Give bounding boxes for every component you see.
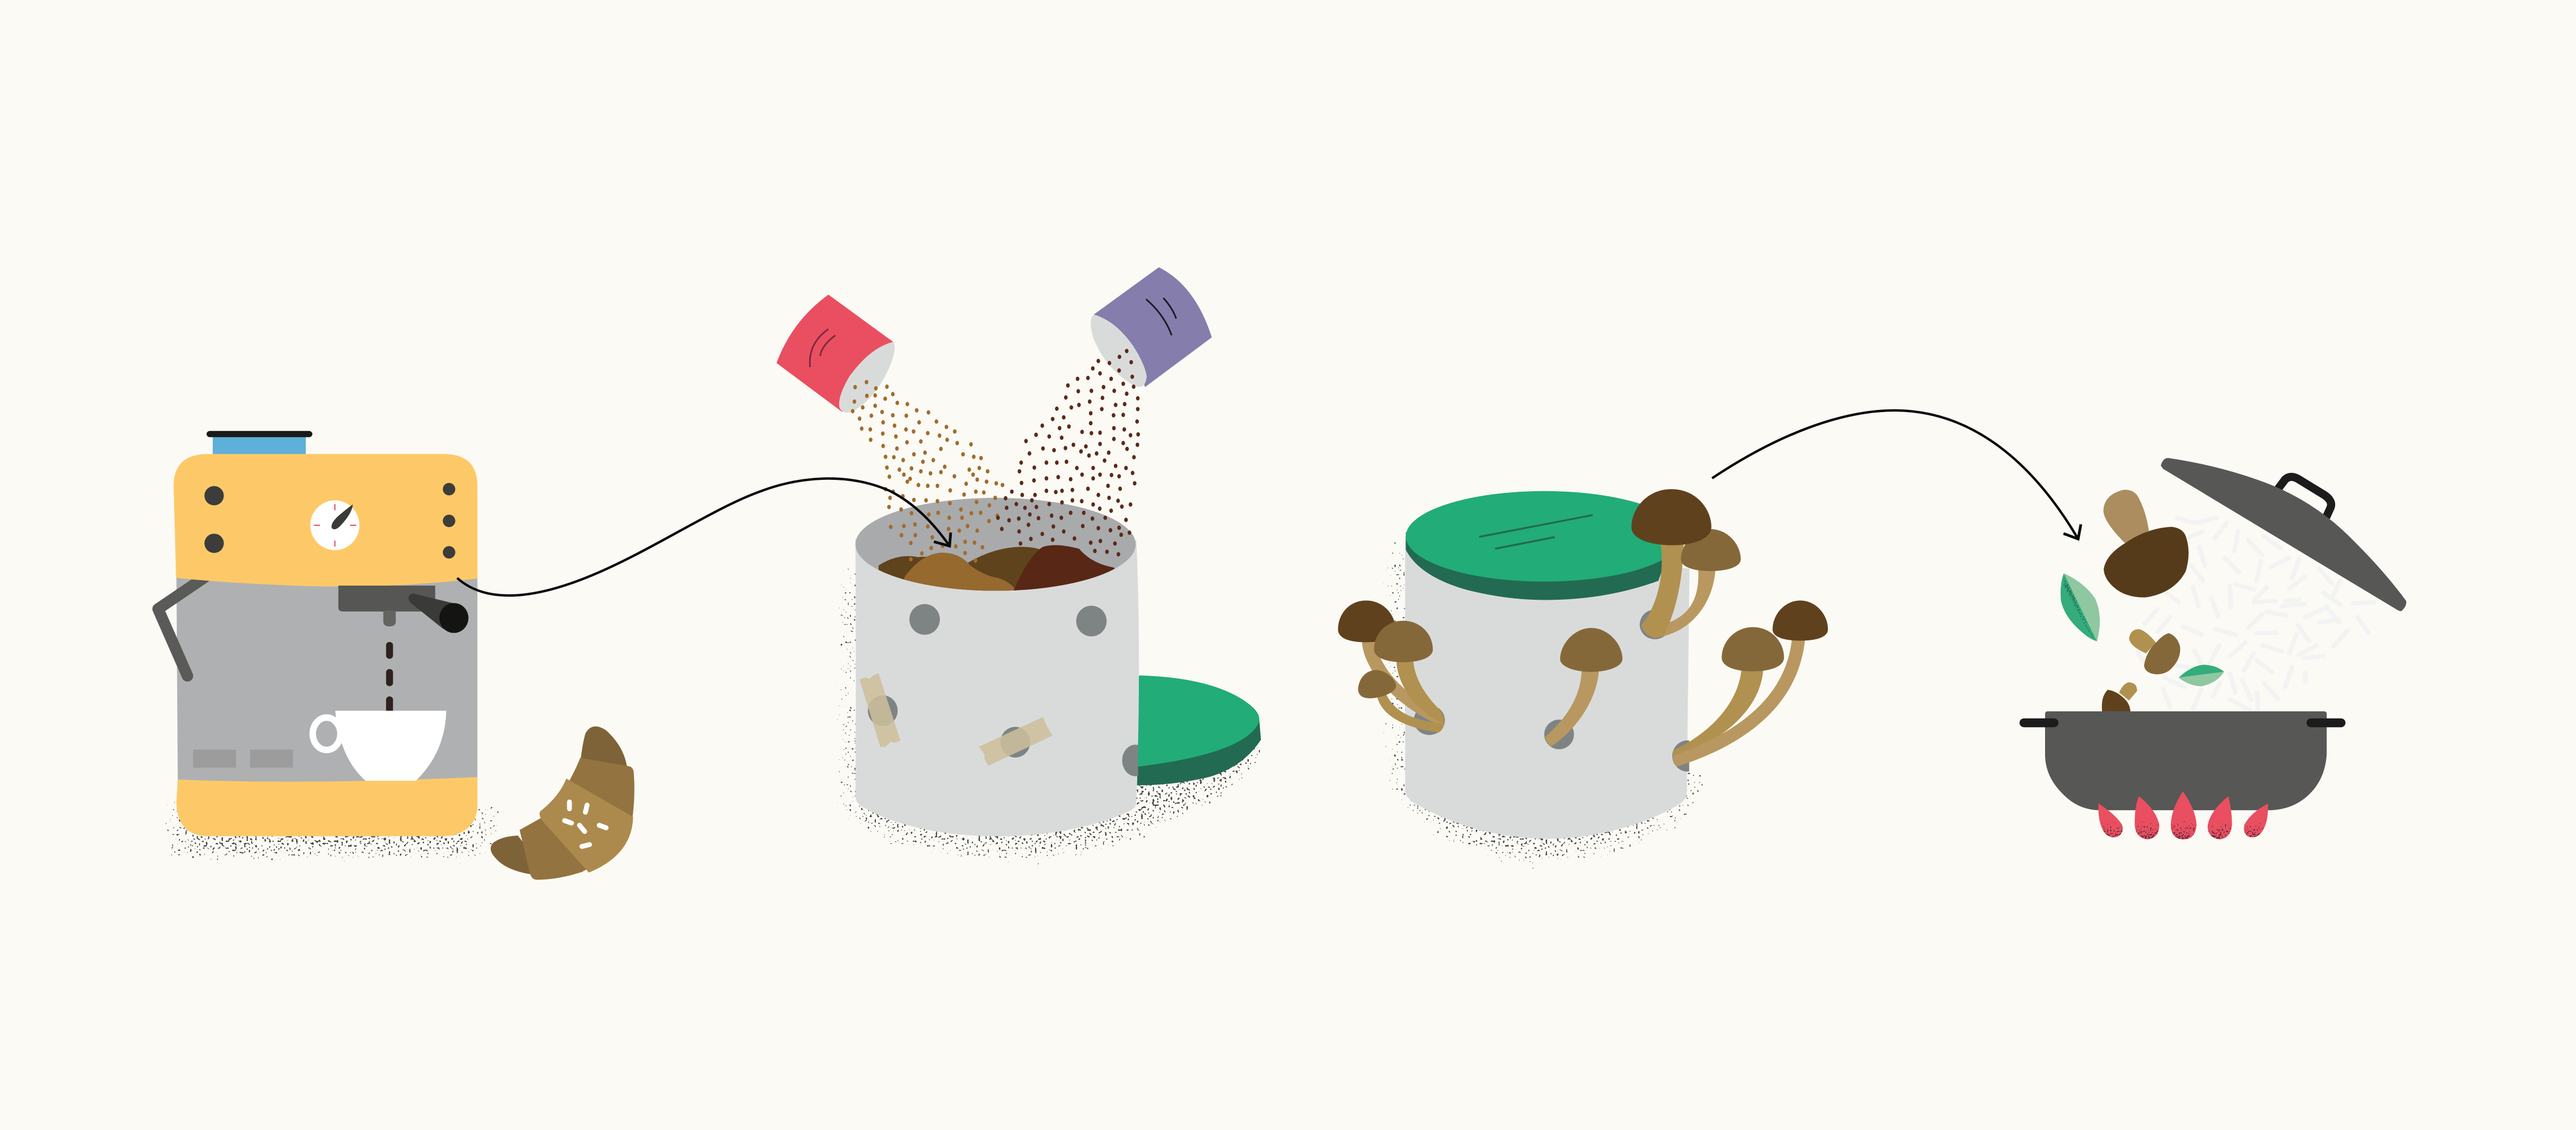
coffee grounds	[879, 545, 1115, 591]
large leaf	[2061, 573, 2100, 641]
pot body	[2045, 711, 2327, 810]
stipple shadow under machine	[158, 794, 508, 866]
mushroom cluster: top right	[1631, 489, 1741, 638]
holes	[1414, 609, 1703, 772]
bag body	[855, 540, 1139, 836]
arrow: mushrooms to pot	[1712, 410, 2081, 539]
closed green lid	[1406, 491, 1683, 600]
flames	[2098, 792, 2268, 839]
rice grains	[2138, 518, 2374, 710]
orange falling grains	[853, 382, 1003, 561]
panel: bag with lid and growing mushrooms	[1338, 489, 1828, 872]
mushroom cluster: left	[1338, 600, 1444, 733]
green lid on ground	[1137, 676, 1261, 785]
large mushroom	[2104, 490, 2189, 598]
brown falling grains	[998, 351, 1138, 554]
croissant	[491, 727, 635, 879]
red shaker	[777, 294, 895, 413]
mushroom: centre	[1545, 628, 1623, 747]
flame stipple	[2098, 792, 2268, 839]
stipple shadow under second bag	[1380, 537, 1716, 872]
panel: cooking pot	[2020, 458, 2406, 839]
tape strips	[860, 673, 1053, 766]
bag holes	[868, 604, 1149, 776]
stipple shadow under bag	[832, 558, 1270, 869]
purple shaker	[1091, 267, 1212, 387]
mushroom entering pot	[2102, 682, 2137, 712]
pot lid with handle	[2161, 458, 2406, 611]
arrow: machine to bag	[457, 479, 951, 595]
small leaf	[2178, 665, 2224, 686]
small mushroom	[2129, 629, 2180, 675]
panel: espresso machine and croissant	[158, 431, 635, 879]
second bag	[1338, 489, 1828, 839]
pot handles	[2020, 718, 2346, 727]
mushroom cluster: right	[1673, 600, 1828, 767]
leaf stipple	[2062, 574, 2097, 641]
bag opening	[855, 498, 1136, 591]
espresso machine	[158, 431, 477, 836]
panel: grow bag with shakers	[777, 267, 1270, 869]
bag and lid	[777, 267, 1261, 836]
